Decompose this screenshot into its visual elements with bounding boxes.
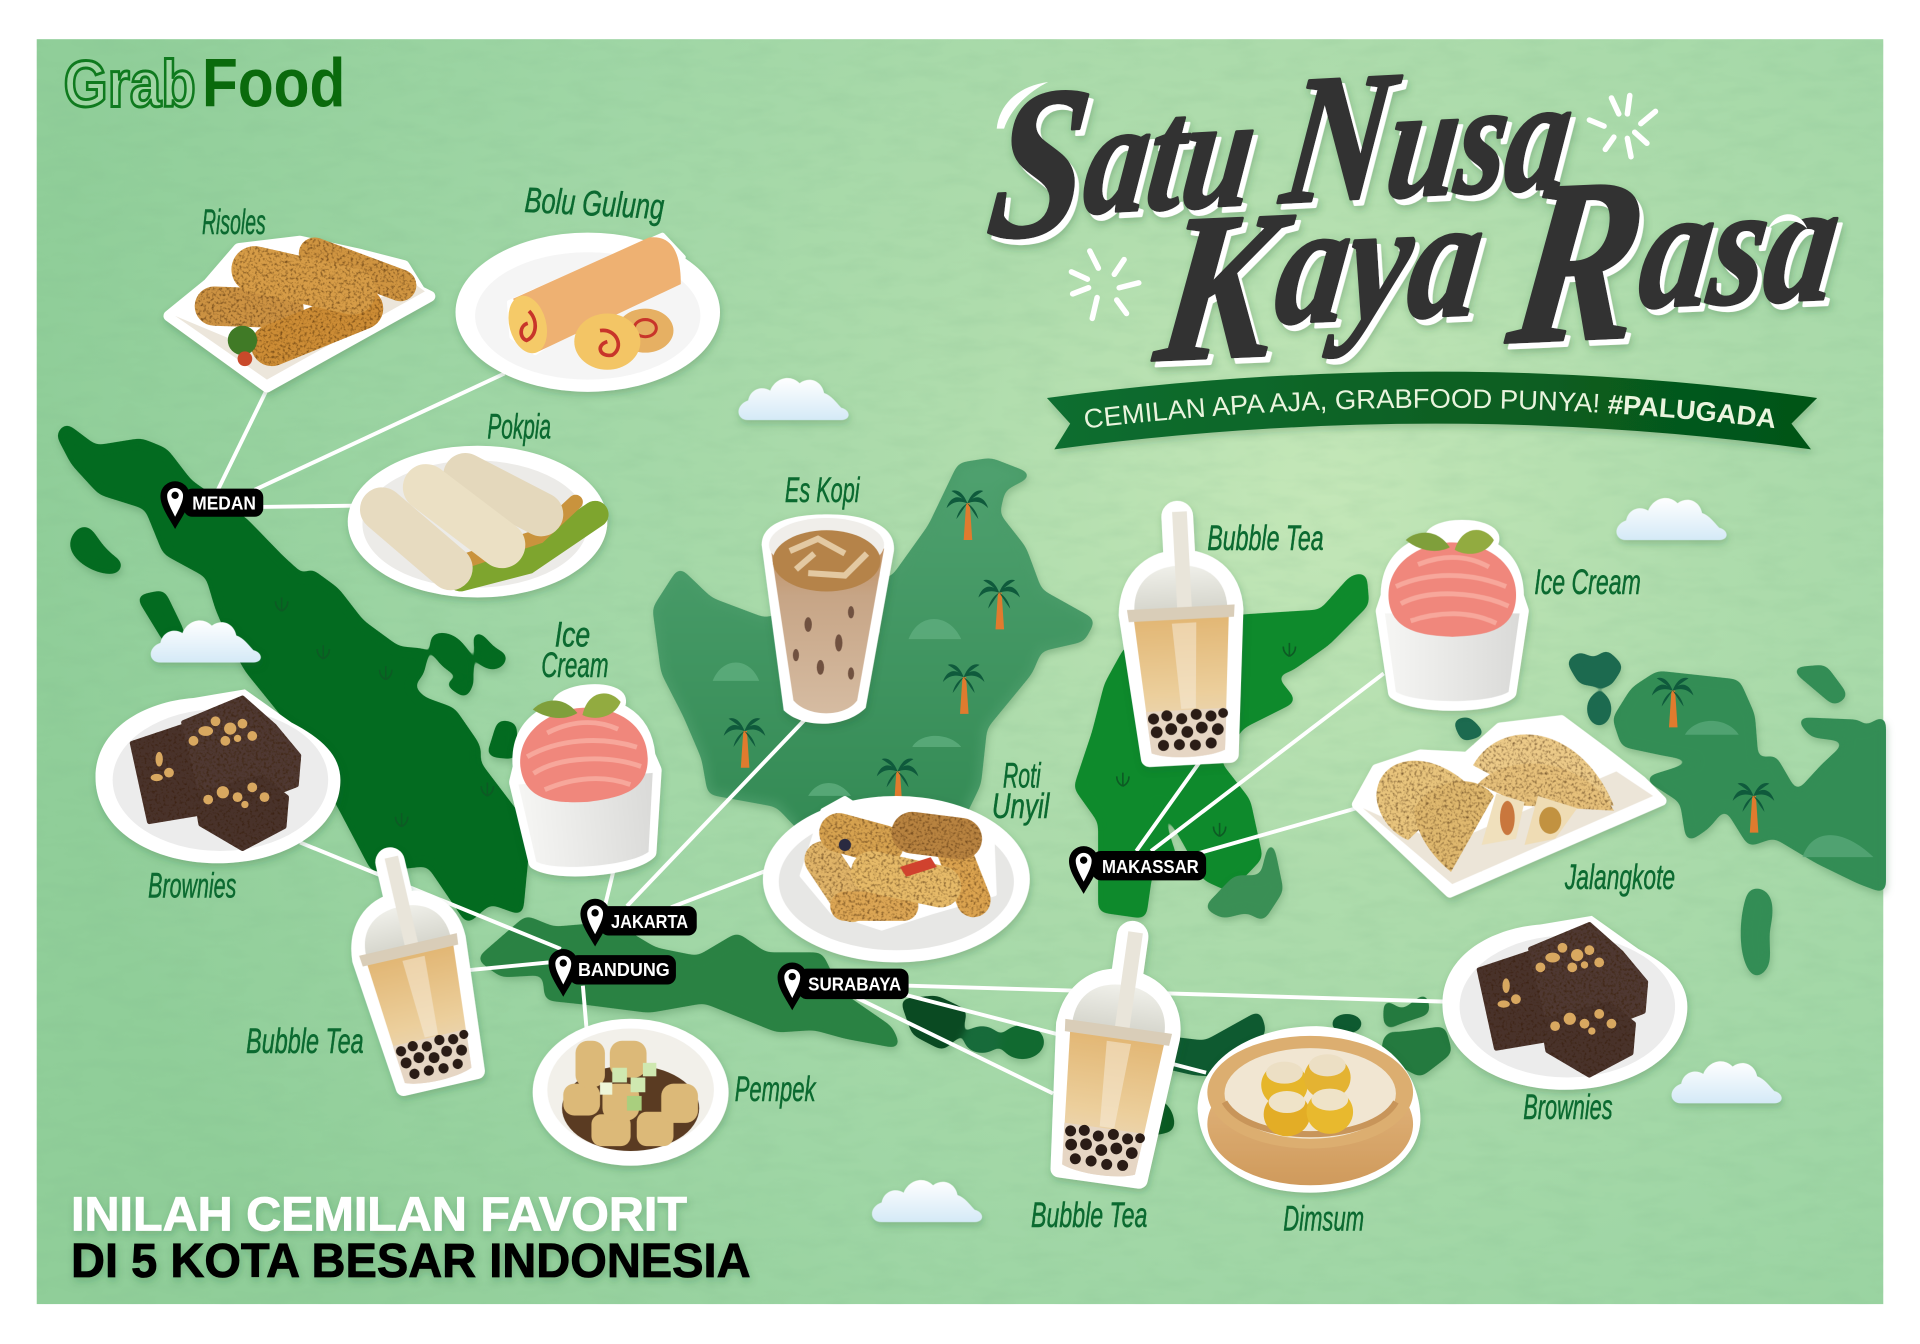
island: Sulawesi xyxy=(1076,576,1367,916)
food labels: Ice Cream xyxy=(1534,562,1641,602)
food labels: Bolu Gulung xyxy=(524,180,665,227)
island: Sumatra xyxy=(59,426,528,921)
food labels: Brownies xyxy=(1523,1087,1613,1127)
food: Bubble Tea Surabaya xyxy=(1044,922,1186,1182)
decorative arc above last a xyxy=(1768,214,1807,229)
food: Pokpia xyxy=(348,446,607,598)
island: Kalimantan xyxy=(655,460,1092,833)
city pin: Bandung xyxy=(549,949,676,997)
icons: sprouts on the islands xyxy=(276,598,1296,836)
icons: palm trees xyxy=(724,490,1774,833)
clouds xyxy=(151,378,1782,1222)
island: Buton xyxy=(1207,844,1281,918)
map of Indonesia xyxy=(59,426,1883,1136)
title: Satu Nusa Kaya Rasa: atu xyxy=(1076,60,1296,248)
island: Java xyxy=(480,918,898,1046)
hills on Papua xyxy=(1685,721,1873,857)
hills on Kalimantan xyxy=(713,619,961,796)
title: Satu Nusa Kaya Rasa: K xyxy=(1145,166,1303,406)
city pin: Medan: MEDAN xyxy=(192,492,256,513)
title: Satu Nusa Kaya Rasa: R xyxy=(1497,128,1659,393)
decorative sparkle top xyxy=(1589,96,1656,157)
food labels: Bubble Tea xyxy=(1207,518,1324,558)
food labels: Ice xyxy=(555,615,590,655)
city pin: Medan xyxy=(160,481,263,529)
food labels xyxy=(148,180,1675,1239)
island: Maluku and Papua xyxy=(1615,667,1883,975)
city pin: Makassar: MAKASSAR xyxy=(1102,856,1199,877)
food labels: Pempek xyxy=(735,1069,817,1109)
city pin: Surabaya: SURABAYA xyxy=(808,974,901,995)
title: Satu Nusa Kaya Rasa xyxy=(979,15,1854,409)
food labels: Bubble Tea xyxy=(246,1021,364,1061)
food labels: Roti xyxy=(1003,755,1041,795)
logo: GrabFood: Grab xyxy=(64,48,196,122)
city pin: Jakarta: JAKARTA xyxy=(611,911,688,932)
ribbon banner: CEMILAN APA AJA, GRABFOOD PUNYA! #PALUGADA xyxy=(1085,389,1774,428)
food labels: Es Kopi xyxy=(785,470,860,510)
islands: Bali and Nusa Tenggara xyxy=(900,992,1452,1136)
city pin: Bandung: BANDUNG xyxy=(578,959,670,980)
food: Brownies Surabaya xyxy=(1442,916,1687,1090)
decorative sparkle left xyxy=(1071,251,1139,318)
islands: Maluku small xyxy=(1452,649,1624,742)
food labels: Pokpia xyxy=(487,406,551,446)
logo: GrabFood: Food xyxy=(202,45,345,122)
bottom headline xyxy=(71,1189,751,1288)
title: Satu Nusa Kaya Rasa: Nusa xyxy=(1274,32,1631,244)
food labels: Jalangkote xyxy=(1564,857,1675,897)
food: Es Kopi xyxy=(762,514,894,724)
food: Ice Cream Makassar xyxy=(1384,528,1521,703)
food: Bolu Gulung xyxy=(456,233,720,392)
food labels: Brownies xyxy=(148,866,236,906)
decorative arc above title S xyxy=(997,82,1048,129)
food: Bubble Tea Bandung xyxy=(339,844,488,1092)
ribbon banner xyxy=(1047,372,1818,456)
connector lines between cities and snacks xyxy=(218,373,1445,1093)
food: Risoles xyxy=(169,241,430,387)
title: Satu Nusa Kaya Rasa: asa xyxy=(1631,146,1850,345)
food: Pempek xyxy=(533,1019,729,1166)
city pin: Surabaya xyxy=(778,962,909,1010)
logo: GrabFood xyxy=(64,45,345,122)
food labels: Cream xyxy=(541,645,609,685)
food labels: Unyil xyxy=(992,786,1050,826)
food labels: Risoles xyxy=(202,202,266,242)
title: Satu Nusa Kaya Rasa: aya xyxy=(1267,160,1529,361)
title: Satu Nusa Kaya Rasa: S xyxy=(979,41,1102,285)
food: Roti Unyil xyxy=(763,796,1030,962)
food: Ice Cream Jakarta xyxy=(510,687,662,874)
food: Jalangkote xyxy=(1357,720,1662,893)
food: Dimsum xyxy=(1198,1026,1420,1193)
food labels: Dimsum xyxy=(1283,1199,1364,1239)
food: Brownies Medan side xyxy=(96,689,340,863)
bottom headline: INILAH CEMILAN FAVORIT xyxy=(71,1189,687,1242)
food labels: Bubble Tea xyxy=(1031,1195,1147,1235)
food: Bubble Tea Makassar xyxy=(1122,507,1242,760)
city pin: Makassar xyxy=(1069,846,1206,894)
city pin: Jakarta xyxy=(580,899,697,947)
bottom headline: DI 5 KOTA BESAR INDONESIA xyxy=(71,1235,751,1288)
